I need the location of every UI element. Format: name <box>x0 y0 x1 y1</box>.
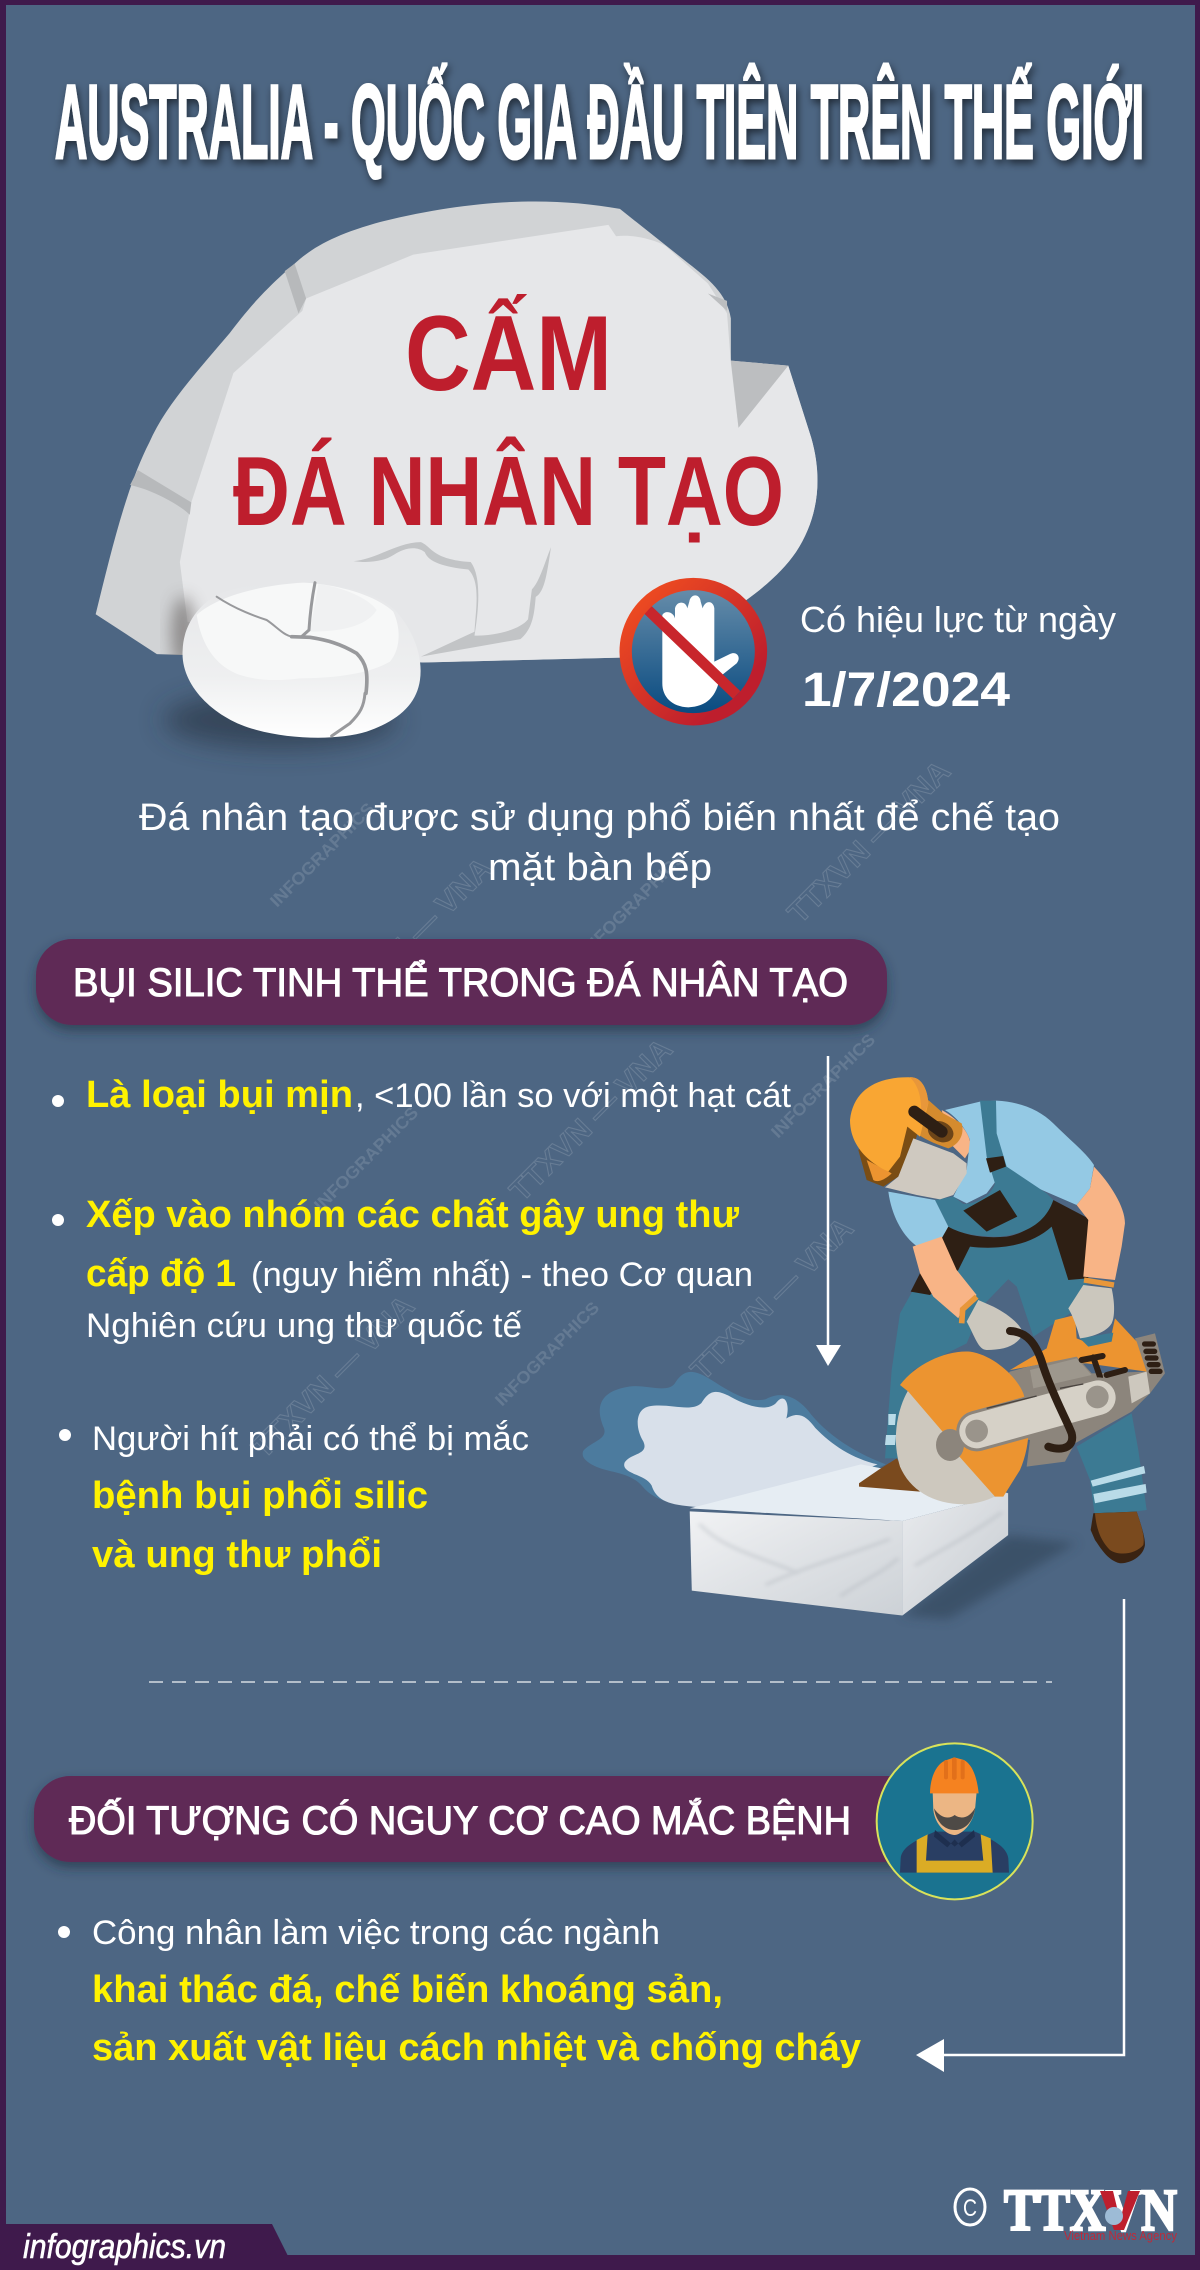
footer: website tag: infographics.vn <box>23 2228 226 2266</box>
text block: intro <box>139 797 1060 889</box>
logo: TTXVN: Vietnam News Agency <box>1064 2228 1177 2243</box>
heading: CẤM: CẤM <box>405 293 612 413</box>
illustration: rock <box>96 201 817 663</box>
heading: ĐÁ NHÂN TẠO: ĐÁ NHÂN TẠO <box>233 436 784 546</box>
bullet: inhalation diseases: và ung thư phổi <box>92 1534 382 1576</box>
watermarks: INFOGRAPHICS <box>767 1030 879 1142</box>
watermarks: TTXVN — VNA <box>246 1290 421 1465</box>
cut-off saw with gloves <box>896 1280 1165 1504</box>
watermarks: TTXVN — VNA <box>504 1033 679 1208</box>
section banner: at-risk people: ĐỐI TƯỢNG CÓ NGUY CƠ CAO MẮC BỆNH <box>69 1797 851 1843</box>
divider <box>149 1681 1052 1683</box>
text block: intro: Đá nhân tạo được sử dụng phổ biến nhất để chế tạo <box>139 797 1060 839</box>
text block: intro: mặt bàn bếp <box>488 847 712 889</box>
bullet: workers in industries: sản xuất vật liệu cách nhiệt và chống cháy <box>92 2027 861 2069</box>
bullet: workers in industries: khai thác đá, chế biến khoáng sản, <box>92 1969 723 2011</box>
watermarks: TTXVN — VNA <box>782 755 957 930</box>
watermarks: INFOGRAPHICS <box>577 848 689 960</box>
bullet: fine dust: , <100 lần so với một hạt cát <box>355 1077 792 1115</box>
section banner: crystalline silica dust: BỤI SILIC TINH THỂ TRONG ĐÁ NHÂN TẠO <box>73 958 848 1005</box>
section banner: crystalline silica dust <box>36 939 887 1025</box>
bullet: group 1 carcinogen: Xếp vào nhóm các chất gây ung thư <box>86 1194 739 1236</box>
section banner: at-risk people <box>34 1776 934 1862</box>
bullet: inhalation diseases <box>59 1420 529 1576</box>
logo: TTXVN: C <box>963 2195 977 2222</box>
bullet: fine dust <box>52 1074 792 1116</box>
upper body <box>850 1077 1125 1360</box>
dust cloud and stone block <box>583 1372 1077 1619</box>
bullet: group 1 carcinogen: Nghiên cứu ung thư quốc tế <box>86 1307 522 1345</box>
arrow: down to dust <box>816 1056 841 1366</box>
watermarks: INFOGRAPHICS <box>491 1298 603 1410</box>
bullet: inhalation diseases: Người hít phải có thể bị mắc <box>92 1420 529 1458</box>
legs and boots <box>859 1270 1147 1563</box>
bullet: group 1 carcinogen: (nguy hiểm nhất) - theo Cơ quan <box>251 1256 753 1294</box>
bullet: workers in industries: Công nhân làm việc trong các ngành <box>92 1914 660 1952</box>
watermarks: TTXVN — VNA <box>324 852 499 1027</box>
bullet: group 1 carcinogen: cấp độ 1 <box>86 1253 236 1295</box>
watermarks: INFOGRAPHICS <box>266 799 378 911</box>
bullet: group 1 carcinogen <box>52 1194 753 1345</box>
watermarks <box>246 755 957 1465</box>
arrow: to workers list <box>916 1599 1124 2072</box>
icon: no hand prohibition sign <box>626 584 761 719</box>
watermarks: INFOGRAPHICS <box>310 1103 422 1215</box>
bullet: inhalation diseases: bệnh bụi phổi silic <box>92 1475 428 1517</box>
icon: worker portrait <box>877 1743 1033 1899</box>
bullet: workers in industries <box>58 1914 861 2069</box>
text: effective date: 1/7/2024 <box>802 664 1010 717</box>
watermarks: TTXVN — VNA <box>685 1212 860 1387</box>
text: effective from label: Có hiệu lực từ ngày <box>800 599 1116 640</box>
bullet: fine dust: Là loại bụi mịn <box>86 1074 353 1116</box>
illustration: small cracked stone <box>163 582 421 748</box>
illustration: worker cutting stone <box>583 1077 1165 1619</box>
